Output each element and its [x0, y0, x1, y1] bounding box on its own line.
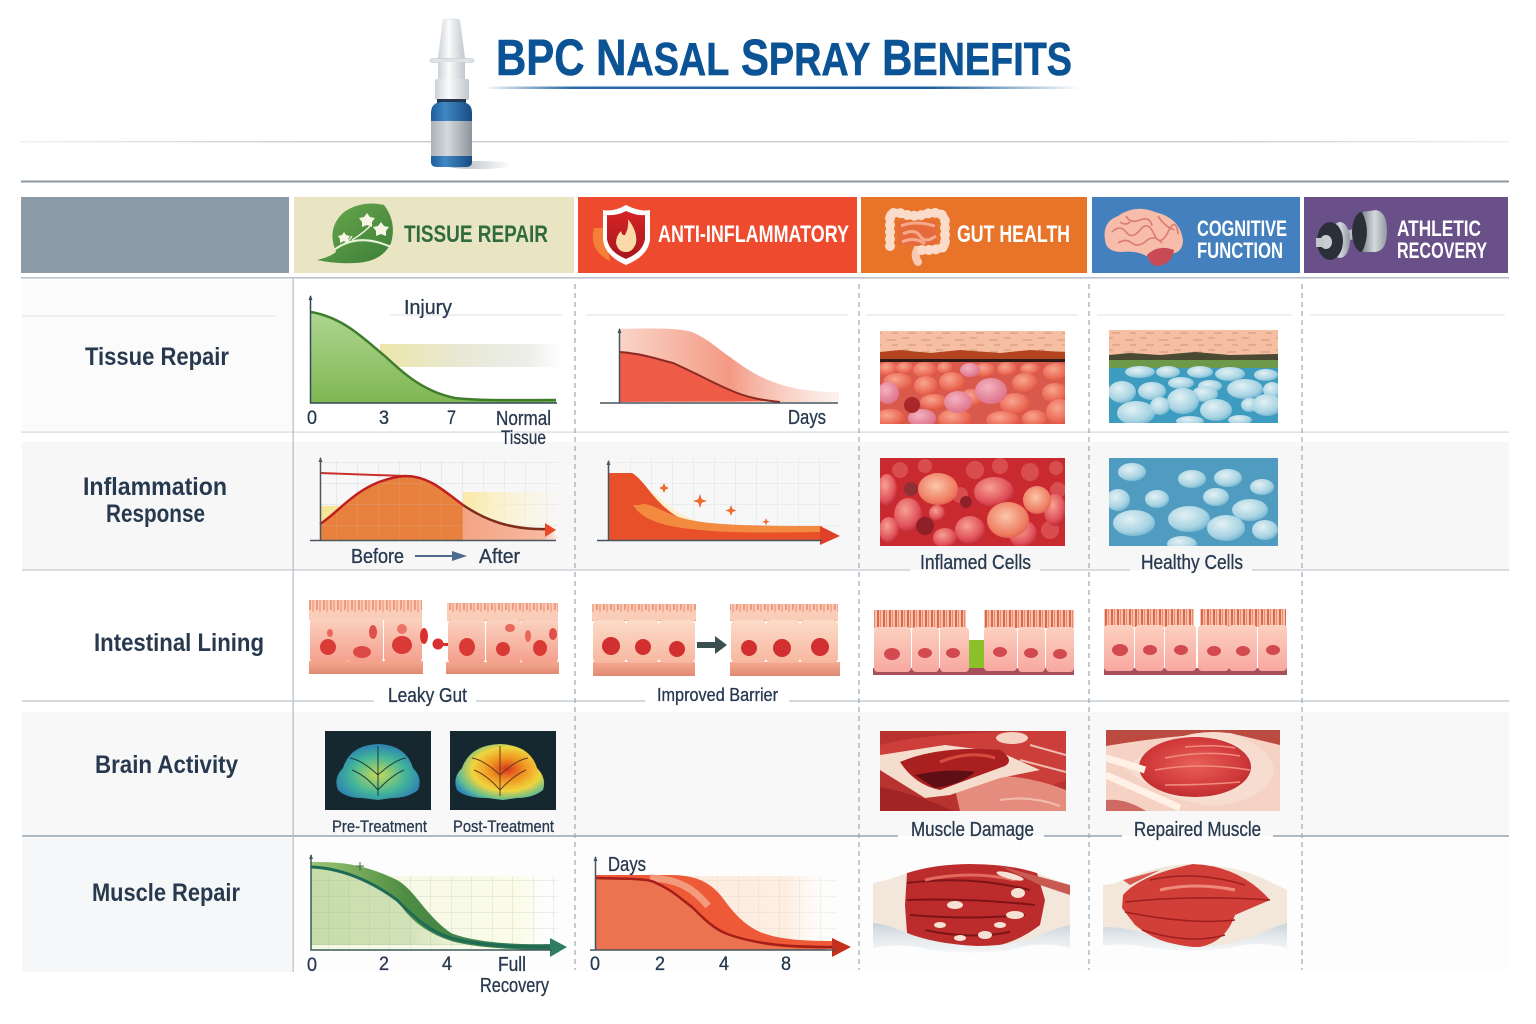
leak droplet	[420, 628, 449, 650]
header: anti-inflammatory: ANTI-INFLAMMATORY	[658, 221, 849, 248]
axis label: before: Before	[351, 546, 404, 568]
header: cognitive function: COGNITIVE	[1197, 216, 1287, 241]
row label: inflammation response	[83, 473, 227, 528]
arrow: before to after	[415, 551, 467, 561]
axis labels: 2	[655, 954, 665, 975]
picture	[1106, 458, 1278, 552]
illustration: repaired muscle	[1103, 860, 1288, 950]
caption: leaky gut: Leaky Gut	[388, 685, 467, 707]
row label: inflammation response: Inflammation	[83, 473, 227, 501]
image: post-treatment brain scan	[450, 731, 556, 836]
header: tissue repair: TISSUE REPAIR	[404, 221, 548, 248]
axis labels: 3	[379, 408, 389, 429]
axis labels: 0	[307, 408, 317, 429]
axis labels: Full	[498, 954, 526, 976]
sparks	[659, 483, 770, 525]
axis labels: Tissue	[501, 428, 546, 449]
right epithelium	[730, 604, 840, 676]
picture	[880, 731, 1066, 811]
image: healthy cells	[1106, 458, 1278, 574]
image: inflamed tissue cross-section	[880, 331, 1065, 424]
chart: tissue repair green curve	[307, 295, 565, 449]
header: tissue repair	[294, 197, 574, 273]
illustration: damaged muscle	[873, 860, 1071, 952]
header: athletic recovery: RECOVERY	[1397, 238, 1487, 263]
chart: muscle recovery green	[307, 854, 567, 997]
axis labels: 7	[447, 408, 456, 429]
caption: inflamed cells: Inflamed Cells	[920, 552, 1031, 574]
chart: muscle recovery red	[590, 854, 851, 975]
axis labels: 4	[442, 954, 452, 975]
header cell: blank	[21, 197, 289, 273]
table grid lines	[21, 277, 1509, 972]
header: athletic recovery	[1304, 197, 1508, 273]
image: inflamed cells	[877, 458, 1066, 574]
arrow	[697, 636, 727, 654]
chart label: injury: Injury	[404, 297, 452, 319]
header: anti-inflammatory	[578, 197, 857, 273]
axis labels: 0	[307, 955, 317, 976]
axis labels	[590, 954, 791, 975]
chart: inflammation before and after	[310, 457, 558, 568]
axis label: days: Days	[788, 407, 826, 429]
header: cognitive function: FUNCTION	[1197, 238, 1283, 263]
axis label: after: After	[479, 546, 520, 568]
row label: intestinal lining: Intestinal Lining	[94, 629, 264, 657]
left epithelium	[309, 600, 423, 674]
image: pre-treatment brain scan	[325, 731, 431, 836]
left epithelium	[592, 604, 696, 676]
diagram: cognitive column barrier intact	[1104, 609, 1287, 675]
row label: inflammation response: Response	[106, 500, 205, 528]
image: healthy tissue cross-section	[1108, 330, 1282, 426]
axis labels	[307, 408, 551, 449]
axis label: days: Days	[608, 854, 646, 876]
picture	[877, 458, 1066, 548]
header: cognitive function	[1092, 197, 1300, 273]
image: repaired muscle	[1106, 730, 1280, 841]
header: gut health: GUT HEALTH	[957, 221, 1070, 248]
row label: tissue repair: Tissue Repair	[85, 343, 229, 371]
chart: inflammation decline with sparks	[597, 457, 840, 545]
right epithelium	[446, 603, 559, 674]
caption: improved barrier: Improved Barrier	[657, 685, 778, 705]
caption: pre-treatment: Pre-Treatment	[332, 817, 427, 836]
header rule lines	[20, 141, 1510, 182]
axis labels: 4	[719, 954, 729, 975]
diagram: gut health barrier with gap	[873, 610, 1074, 675]
caption: repaired muscle: Repaired Muscle	[1134, 819, 1261, 841]
axis labels: 0	[590, 954, 600, 975]
caption: muscle damage: Muscle Damage	[911, 819, 1034, 841]
axis labels: 2	[379, 954, 389, 975]
diagram: leaky gut	[309, 600, 559, 707]
header: athletic recovery: ATHLETIC	[1397, 216, 1481, 241]
row label: brain activity: Brain Activity	[95, 751, 238, 779]
row label: muscle repair: Muscle Repair	[92, 879, 240, 907]
axis labels: Normal	[496, 408, 551, 430]
chart: anti-inflammatory days curve	[600, 328, 839, 429]
caption: healthy cells: Healthy Cells	[1141, 552, 1243, 574]
axis labels: 8	[781, 954, 791, 975]
caption: post-treatment: Post-Treatment	[453, 817, 554, 836]
image: muscle damage	[880, 731, 1066, 841]
row backgrounds	[22, 280, 1509, 972]
header: gut health	[861, 197, 1087, 273]
header row	[21, 197, 1508, 273]
axis labels	[307, 954, 549, 997]
title: BPC NASAL SPRAY BENEFITS	[496, 29, 1072, 86]
row labels	[83, 343, 264, 907]
picture	[1106, 730, 1280, 811]
diagram: improved barrier	[592, 604, 840, 705]
icon: nasal spray bottle	[430, 19, 512, 169]
axis labels: Recovery	[480, 975, 549, 997]
